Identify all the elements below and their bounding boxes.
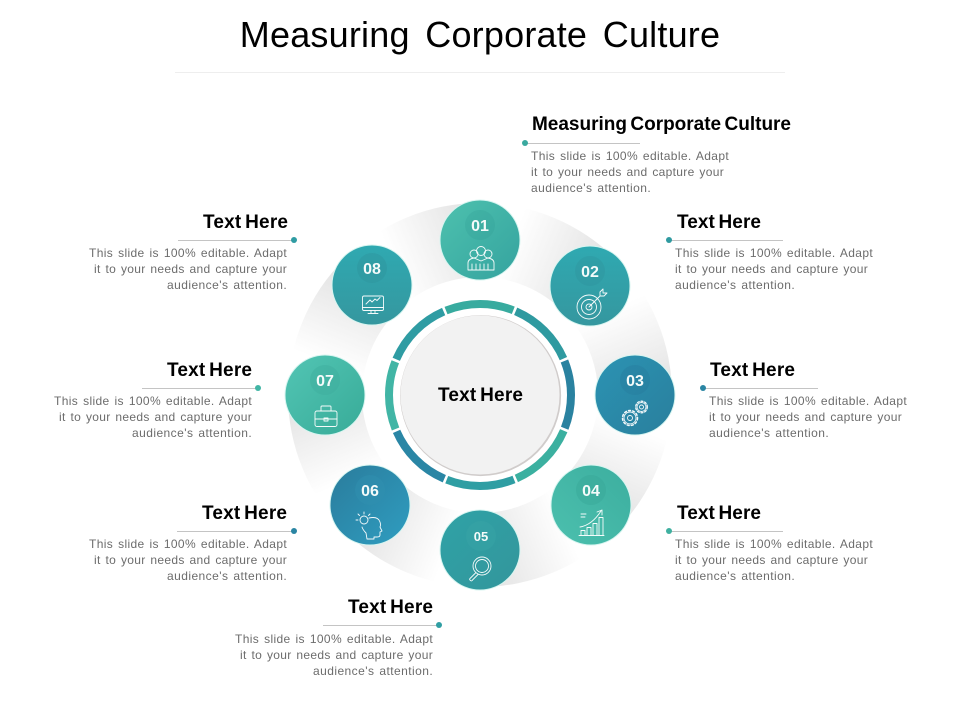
node 01: 01 — [471, 218, 489, 235]
label: 08: audience's attention. — [167, 278, 287, 292]
node 08 — [332, 244, 412, 326]
label: 08: it to your needs and capture your — [94, 262, 287, 276]
node 04 — [550, 464, 632, 546]
center disc: Text Here — [438, 385, 523, 406]
label: 07 — [54, 360, 261, 440]
label: 06: it to your needs and capture your — [94, 553, 287, 567]
icon: growth chart — [579, 510, 604, 536]
label: measuring corporate culture: it to your needs and capture your — [531, 165, 724, 179]
icon: briefcase — [315, 406, 337, 426]
segmented inner ring — [360, 275, 600, 515]
node 07 — [284, 354, 366, 436]
icon: gears — [622, 401, 647, 426]
node 05: 05 — [474, 529, 488, 544]
label: 02: This slide is 100% editable. Adapt — [675, 246, 873, 260]
label: 08 — [89, 212, 297, 292]
node 07: 07 — [316, 373, 334, 390]
label: measuring corporate culture: Measuring Corporate Culture — [532, 114, 791, 135]
label: 08: This slide is 100% editable. Adapt — [89, 246, 287, 260]
label: 02: Text Here — [677, 212, 761, 233]
node 01 — [440, 200, 520, 280]
label: 05: it to your needs and capture your — [240, 648, 433, 662]
title: Measuring Corporate Culture — [240, 14, 720, 55]
label: 04: it to your needs and capture your — [675, 553, 868, 567]
label: 05: Text Here — [348, 597, 433, 618]
label: 04: Text Here — [677, 503, 761, 524]
label: 05 — [235, 597, 442, 678]
label: measuring corporate culture: audience's attention. — [531, 181, 651, 195]
node 04: 04 — [582, 483, 600, 500]
node 02 — [550, 246, 630, 326]
label: 08: Text Here — [203, 212, 288, 233]
icon: team — [468, 246, 494, 270]
label: measuring corporate culture — [522, 114, 791, 195]
label: 03: audience's attention. — [709, 426, 829, 440]
label: 05: audience's attention. — [313, 664, 433, 678]
icon: target — [577, 289, 607, 319]
label: measuring corporate culture: This slide is 100% editable. Adapt — [531, 149, 729, 163]
icon: head with idea — [356, 512, 382, 539]
node 06: 06 — [361, 483, 379, 500]
label: 04: audience's attention. — [675, 569, 795, 583]
label: 04 — [666, 503, 873, 583]
node 03 — [594, 354, 676, 436]
label: 07: Text Here — [167, 360, 252, 381]
label: 07: audience's attention. — [132, 426, 252, 440]
node 08: 08 — [363, 261, 381, 278]
icon: magnifier — [470, 557, 491, 581]
node 06 — [330, 464, 410, 546]
label: 03 — [700, 360, 907, 440]
center disc — [400, 315, 561, 476]
background ring — [288, 203, 672, 587]
label: 03: This slide is 100% editable. Adapt — [709, 394, 907, 408]
label: 06: Text Here — [202, 503, 287, 524]
node 02: 02 — [581, 264, 599, 281]
node 03: 03 — [626, 373, 644, 390]
label: 06: This slide is 100% editable. Adapt — [89, 537, 287, 551]
node 05 — [440, 510, 520, 590]
label: 07: This slide is 100% editable. Adapt — [54, 394, 252, 408]
label: 02 — [666, 212, 873, 292]
label: 03: Text Here — [710, 360, 795, 381]
label: 03: it to your needs and capture your — [709, 410, 902, 424]
label: 06 — [89, 503, 297, 583]
label: 02: audience's attention. — [675, 278, 795, 292]
label: 07: it to your needs and capture your — [59, 410, 252, 424]
label: 06: audience's attention. — [167, 569, 287, 583]
label: 02: it to your needs and capture your — [675, 262, 868, 276]
label: 04: This slide is 100% editable. Adapt — [675, 537, 873, 551]
label: 05: This slide is 100% editable. Adapt — [235, 632, 433, 646]
icon: monitor chart — [362, 296, 384, 314]
